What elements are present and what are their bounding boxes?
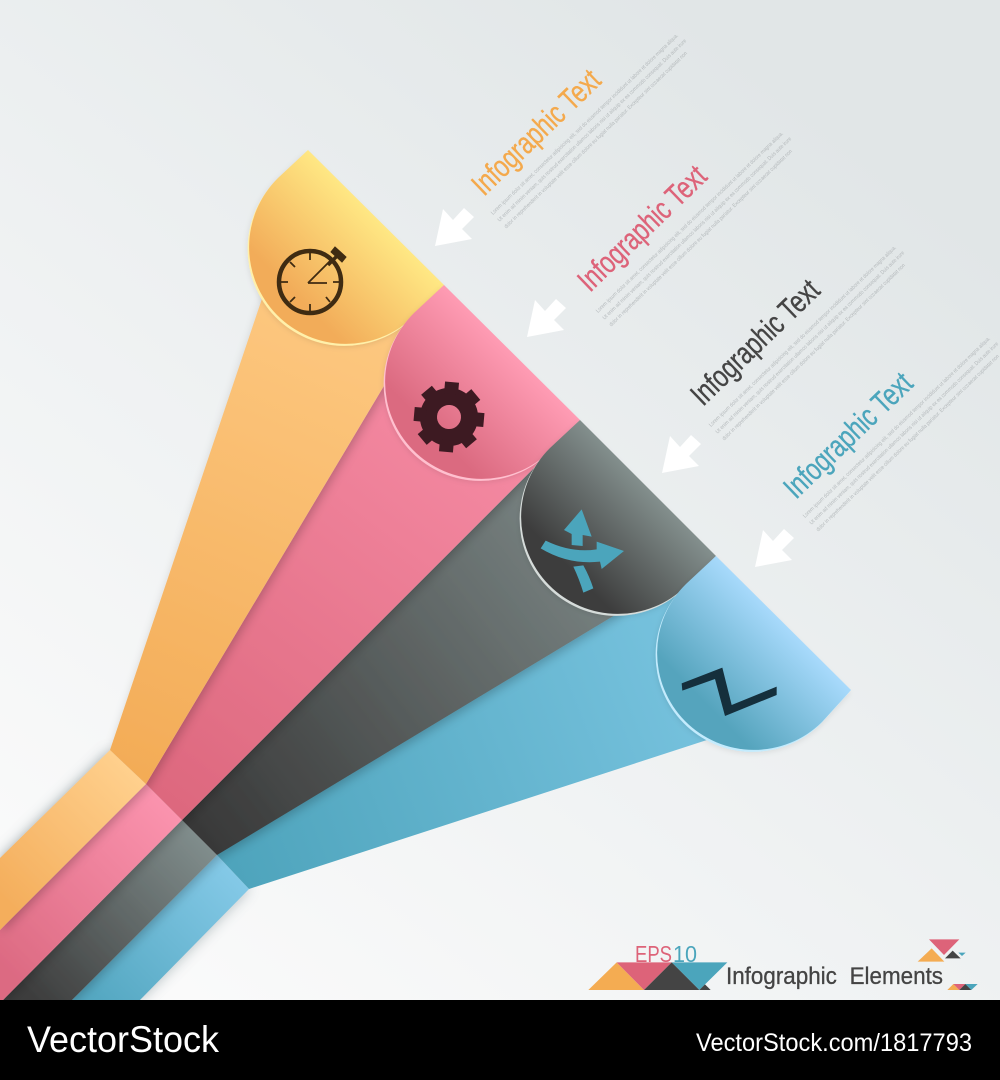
head: dark crossing arrows — [520, 420, 716, 616]
logo text: EPS10: EPS — [635, 941, 672, 967]
text block: pink: Lorem ipsum dolor sit amet, consectetur adipisicing elit, sed do eiusmod tempor incididunt ut labore et dolore magna aliqua. — [595, 131, 785, 314]
text block: dark: Ut enim ad minim veniam, quis nostrud exercitation ullamco laboris nisi ut aliquip ex ea commodo consequat. Duis aute irure — [715, 250, 906, 435]
heading: blue: Infographic Text — [777, 365, 920, 505]
arrow: blue item — [755, 529, 794, 567]
footer brand: VectorStock — [27, 1019, 219, 1060]
heading: pink: Infographic Text — [571, 158, 714, 298]
ribbon: orange strip and beam — [0, 260, 414, 930]
footer url: VectorStock.com/1817793 — [696, 1029, 972, 1057]
ribbon: blue strip and beam — [72, 519, 753, 1000]
text block: dark: Lorem ipsum dolor sit amet, consectetur adipisicing elit, sed do eiusmod tempor incididunt ut labore et dolore magna aliqua. — [708, 245, 898, 428]
arrow: pink item — [527, 299, 566, 337]
text block: orange: Ut enim ad minim veniam, quis nostrud exercitation ullamco laboris nisi ut aliquip ex ea commodo consequat. Duis aute irure — [497, 38, 688, 223]
head: blue zigzag — [656, 556, 851, 752]
logo text: version: 10 — [673, 941, 697, 967]
logo triangles: bottom right — [947, 984, 978, 990]
text block: pink: Ut enim ad minim veniam, quis nostrud exercitation ullamco laboris nisi ut aliquip ex ea commodo consequat. Duis aute irure — [602, 136, 793, 321]
arrow: dark item — [662, 435, 701, 473]
ribbon: dark strip and beam — [3, 462, 620, 1000]
logo triangles: main — [588, 962, 727, 990]
text block: orange: Lorem ipsum dolor sit amet, consectetur adipisicing elit, sed do eiusmod tempor incididunt ut labore et dolore magna aliqua. — [490, 33, 680, 216]
icon: stopwatch — [279, 247, 346, 313]
text block: dark: dolor in reprehenderit in voluptate velit esse cillum dolore eu fugiat nulla pariatur. Excepteur sint occaecat cupidatat non — [721, 263, 907, 442]
funnel shadow — [0, 750, 249, 1000]
arrow: orange item — [435, 208, 474, 246]
icon: gear — [411, 379, 487, 455]
logo: infographic elements — [588, 939, 978, 990]
icon: zigzag line — [682, 668, 777, 716]
footer band — [0, 1000, 1000, 1080]
text block: orange: dolor in reprehenderit in voluptate velit esse cillum dolore eu fugiat nulla pariatur. Excepteur sint occaecat cupidatat non — [503, 51, 689, 230]
icon: crossing arrows — [541, 509, 624, 593]
head: orange stopwatch — [248, 150, 444, 346]
text block: pink: dolor in reprehenderit in voluptate velit esse cillum dolore eu fugiat nulla pariatur. Excepteur sint occaecat cupidatat non — [608, 149, 794, 328]
heading: dark: Infographic Text — [684, 272, 827, 412]
heading: orange: Infographic Text — [465, 62, 608, 202]
head: pink gear — [384, 285, 580, 481]
logo triangles: top right — [918, 939, 966, 962]
ribbon: pink strip and beam — [0, 359, 545, 1000]
logo text: infographic elements: Infographic Elements — [726, 963, 943, 990]
